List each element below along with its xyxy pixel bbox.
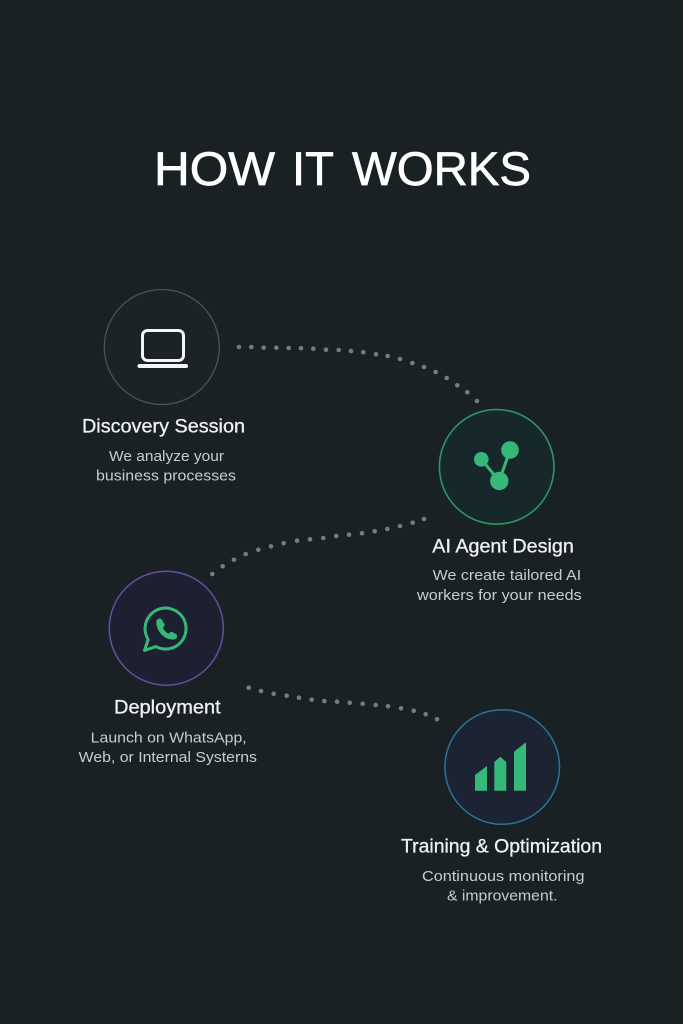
panel: discovery session xyxy=(82,290,245,484)
heading: training and optimization: Training & Optimization xyxy=(401,837,602,858)
circle badge: deployment xyxy=(109,571,223,685)
title: HOW xyxy=(154,142,276,195)
circle badge: training xyxy=(445,710,560,824)
panel: deployment xyxy=(79,571,257,766)
icon: whatsapp xyxy=(144,608,186,650)
panel: ai agent design xyxy=(416,410,582,604)
description: deployment line 2: Web, or Internal Systerns xyxy=(79,750,257,766)
description: design line 2: workers for your needs xyxy=(416,588,582,604)
heading: deployment: Deployment xyxy=(114,697,221,718)
description: training line 2: & improvement. xyxy=(447,889,558,905)
title: WORKS xyxy=(352,142,531,195)
title xyxy=(154,142,531,195)
title: IT xyxy=(292,142,334,195)
dotted connector: deployment to training xyxy=(246,685,439,722)
dotted connector: discovery to design xyxy=(237,345,479,403)
description: training line 1: Continuous monitoring xyxy=(422,869,584,885)
dotted connector: design to deployment xyxy=(210,517,426,576)
description: design line 1: We create tailored AI xyxy=(433,568,581,584)
icon: rising bar chart xyxy=(475,742,526,791)
heading: ai agent design: AI Agent Design xyxy=(432,536,574,558)
icon: connected nodes xyxy=(474,441,519,490)
heading: discovery session: Discovery Session xyxy=(82,416,245,438)
panel: training and optimization xyxy=(401,710,602,905)
circle badge: design xyxy=(439,410,554,524)
description: discovery line 2: business processes xyxy=(96,468,236,484)
description: discovery line 1: We analyze your xyxy=(109,449,224,465)
circle badge: discovery xyxy=(104,290,219,404)
icon: laptop xyxy=(140,330,186,366)
description: deployment line 1: Launch on WhatsApp, xyxy=(91,730,247,746)
